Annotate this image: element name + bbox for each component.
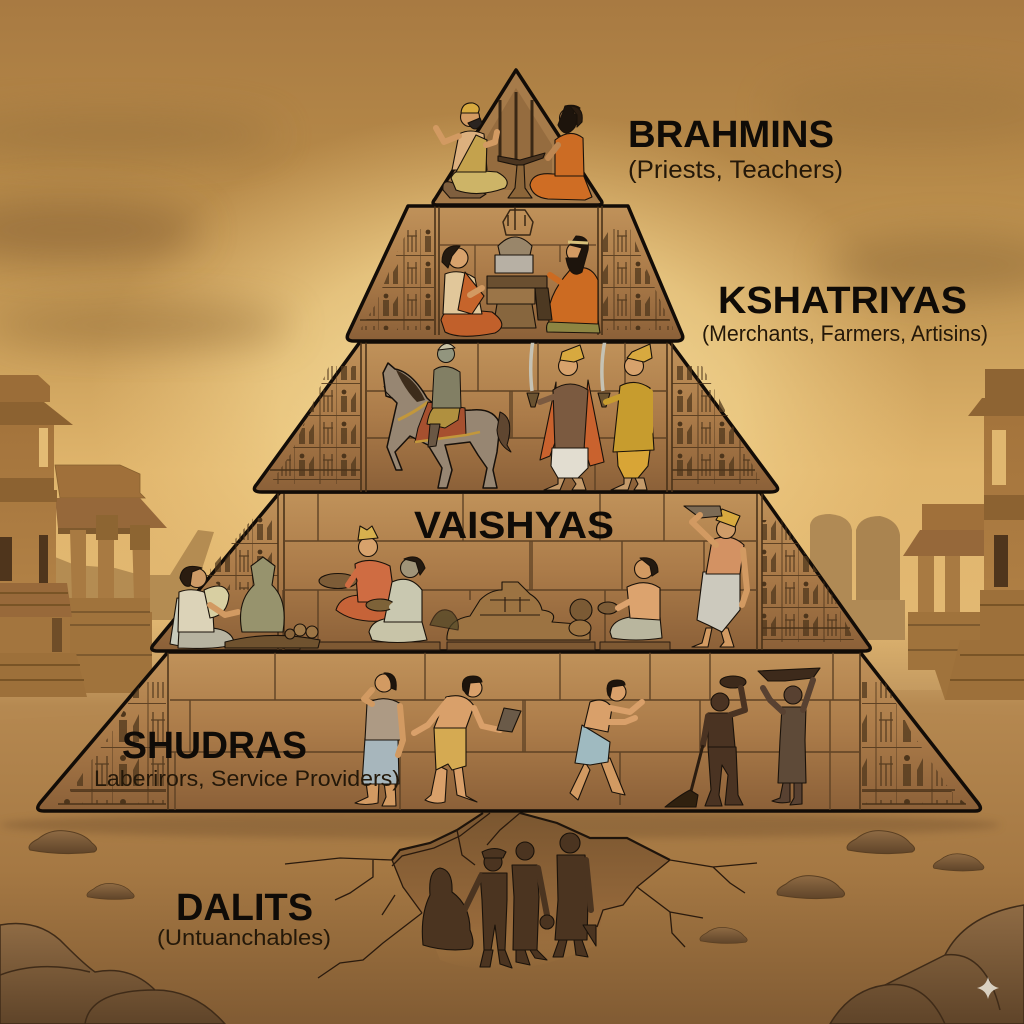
large foreground rocks bbox=[0, 924, 225, 1024]
tower bbox=[0, 375, 87, 697]
horse and rider bbox=[383, 343, 511, 488]
figure: labourer bending bbox=[570, 680, 642, 800]
label: brahmins bbox=[628, 114, 843, 184]
label: shudras bbox=[94, 725, 400, 791]
tier 5: shudras bbox=[38, 652, 980, 811]
tier 1: brahmins bbox=[433, 70, 602, 205]
right frieze panel bbox=[757, 492, 855, 650]
label: vaishyas: VAISHYAS bbox=[414, 505, 614, 547]
label: brahmins: (Priests, Teachers) bbox=[628, 156, 843, 184]
figure: seated man with pot bbox=[598, 558, 662, 640]
figure: seated merchant with urn bbox=[170, 566, 238, 648]
right frieze panel bbox=[860, 652, 966, 810]
label: kshatriyas: (Merchants, Farmers, Artisins) bbox=[702, 321, 988, 346]
vaishya scene bbox=[170, 506, 747, 648]
brick wall bbox=[367, 342, 666, 490]
left temple ruins bbox=[0, 375, 167, 697]
left frieze panel bbox=[205, 492, 284, 650]
label: kshatriyas: KSHATRIYAS bbox=[718, 280, 967, 322]
icon: sparkle watermark bbox=[977, 977, 999, 999]
pyramid bbox=[38, 70, 980, 811]
urn bbox=[225, 557, 320, 648]
right temple ruins bbox=[903, 369, 1024, 700]
right frieze panel bbox=[667, 342, 762, 492]
offerings pile bbox=[430, 582, 592, 640]
label: kshatriyas bbox=[702, 280, 988, 346]
cracked ground pit bbox=[285, 813, 757, 978]
distant hills and rock towers bbox=[55, 514, 905, 640]
label: shudras: SHUDRAS bbox=[122, 725, 307, 767]
left frieze panel bbox=[270, 342, 366, 492]
figure: dark bearer bbox=[758, 668, 820, 805]
label: dalits bbox=[157, 887, 331, 950]
figure: servant with book bbox=[414, 676, 521, 803]
shudra figures bbox=[355, 668, 820, 807]
brick wall bbox=[283, 492, 757, 650]
left frieze panel bbox=[58, 652, 168, 810]
figure: seated priest left bbox=[441, 246, 502, 336]
label: dalits: DALITS bbox=[176, 887, 313, 929]
warrior in red cape bbox=[527, 340, 604, 490]
right frieze panel bbox=[598, 206, 674, 335]
tier 2: scene bbox=[347, 205, 683, 341]
figure: brahmin right bbox=[530, 105, 592, 200]
label: brahmins: BRAHMINS bbox=[628, 114, 834, 156]
figure: white merchant bbox=[366, 557, 427, 642]
figure: standing attendant bbox=[355, 673, 403, 806]
brick wall bbox=[170, 652, 860, 810]
warrior in yellow bbox=[598, 340, 654, 490]
ground rocks bbox=[0, 831, 1024, 1024]
dalit figures silhouette bbox=[422, 833, 596, 968]
pavilion bbox=[55, 465, 167, 693]
tier 3: kshatriyas scene bbox=[254, 340, 778, 492]
figure: standing woman with basket bbox=[684, 506, 747, 647]
left frieze panel bbox=[360, 206, 439, 335]
figure: seated priest right bbox=[535, 236, 600, 333]
label: dalits: (Untuanchables) bbox=[157, 925, 331, 950]
lectern with book bbox=[498, 153, 545, 198]
tier 4: vaishyas bbox=[152, 492, 870, 651]
altar bbox=[487, 205, 547, 328]
figure: brahmin left bbox=[436, 103, 507, 198]
figure: dark sweeper bbox=[665, 676, 746, 807]
low platforms bbox=[300, 642, 670, 650]
figure: red merchant with bowl bbox=[319, 526, 395, 621]
label: shudras: Laberirors, Service Providers) bbox=[94, 766, 400, 791]
